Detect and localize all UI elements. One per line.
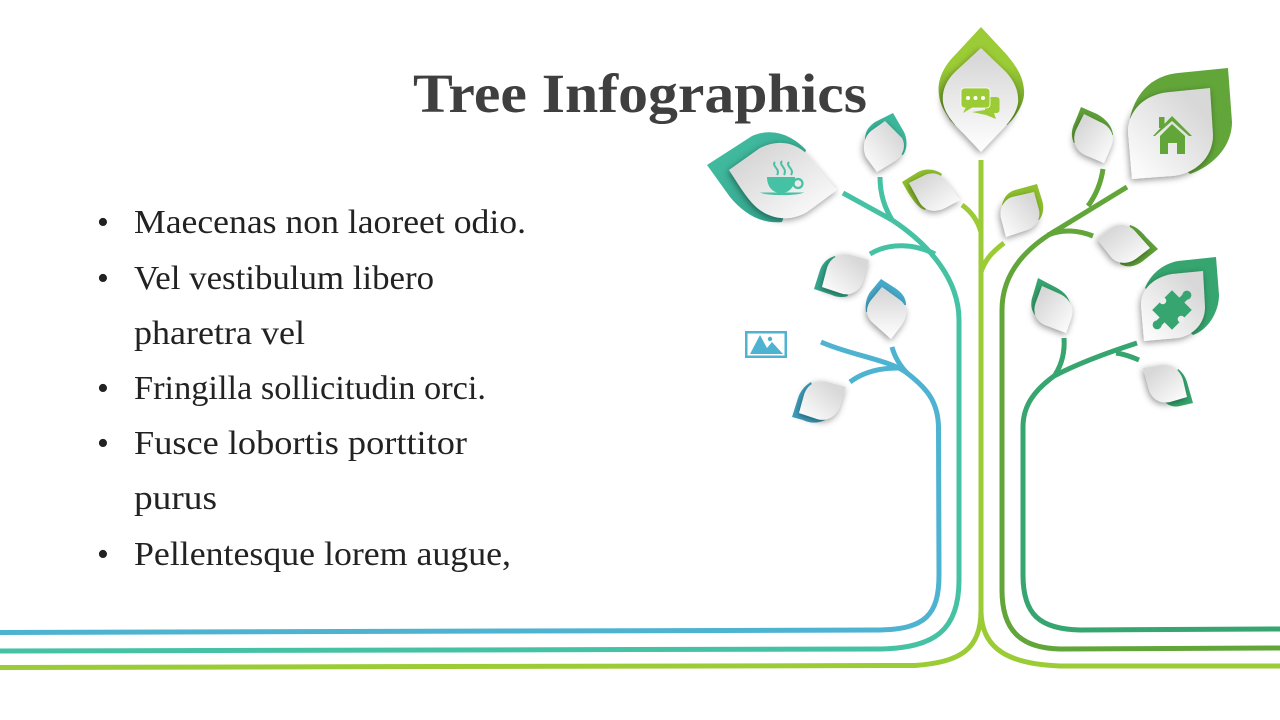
icon: house xyxy=(1153,116,1192,154)
bullet item 5: • xyxy=(97,536,109,573)
stem: blue xyxy=(0,342,939,632)
leaf: home xyxy=(1128,68,1232,179)
bullet item 2: Vel vestibulum libero xyxy=(134,260,434,297)
leaf: chat top xyxy=(939,27,1024,152)
bullet item 2: • xyxy=(97,260,109,297)
leaf: puzzle xyxy=(1141,257,1219,341)
leaf: coffee xyxy=(707,132,837,222)
bullet item 1: • xyxy=(97,204,109,241)
bullet item 4: Fusce lobortis porttitor xyxy=(134,425,468,462)
leaf: small blue lower xyxy=(792,381,846,423)
bullet item 5: Pellentesque lorem augue, xyxy=(134,536,511,573)
leaf: small lime right xyxy=(1000,184,1043,237)
icon: chat bubbles xyxy=(961,88,1000,119)
stem: sea green xyxy=(1023,338,1280,630)
leaf: small teal top xyxy=(864,113,906,172)
bullet list xyxy=(97,204,526,573)
leaf: small green right xyxy=(1097,225,1158,266)
stem: green xyxy=(1002,169,1280,649)
leaf: small sea green left xyxy=(1031,278,1072,333)
bullet item 1: Maecenas non laoreet odio. xyxy=(134,204,526,241)
stem: teal xyxy=(0,177,959,651)
icon: puzzle piece xyxy=(1142,280,1202,340)
bullet item 3: Fringilla sollicitudin orci. xyxy=(134,370,486,407)
stem: lime trunk xyxy=(0,160,1280,668)
leaf: small green top xyxy=(1072,107,1113,163)
icon: image xyxy=(746,332,786,357)
bullet item 2 continuation: pharetra vel xyxy=(134,315,305,352)
icon: coffee cup xyxy=(760,161,804,195)
leaf: small lime left xyxy=(902,170,960,211)
tree stems xyxy=(0,160,1280,668)
bullet item 3: • xyxy=(97,370,109,407)
leaf: small teal lower xyxy=(814,254,869,297)
bullet item 4: • xyxy=(97,425,109,462)
bullet item 4 continuation: purus xyxy=(134,480,217,517)
leaf: small sea green lower xyxy=(1143,365,1193,407)
title: Tree Infographics xyxy=(413,63,867,124)
leaf: small blue upper xyxy=(866,279,906,339)
